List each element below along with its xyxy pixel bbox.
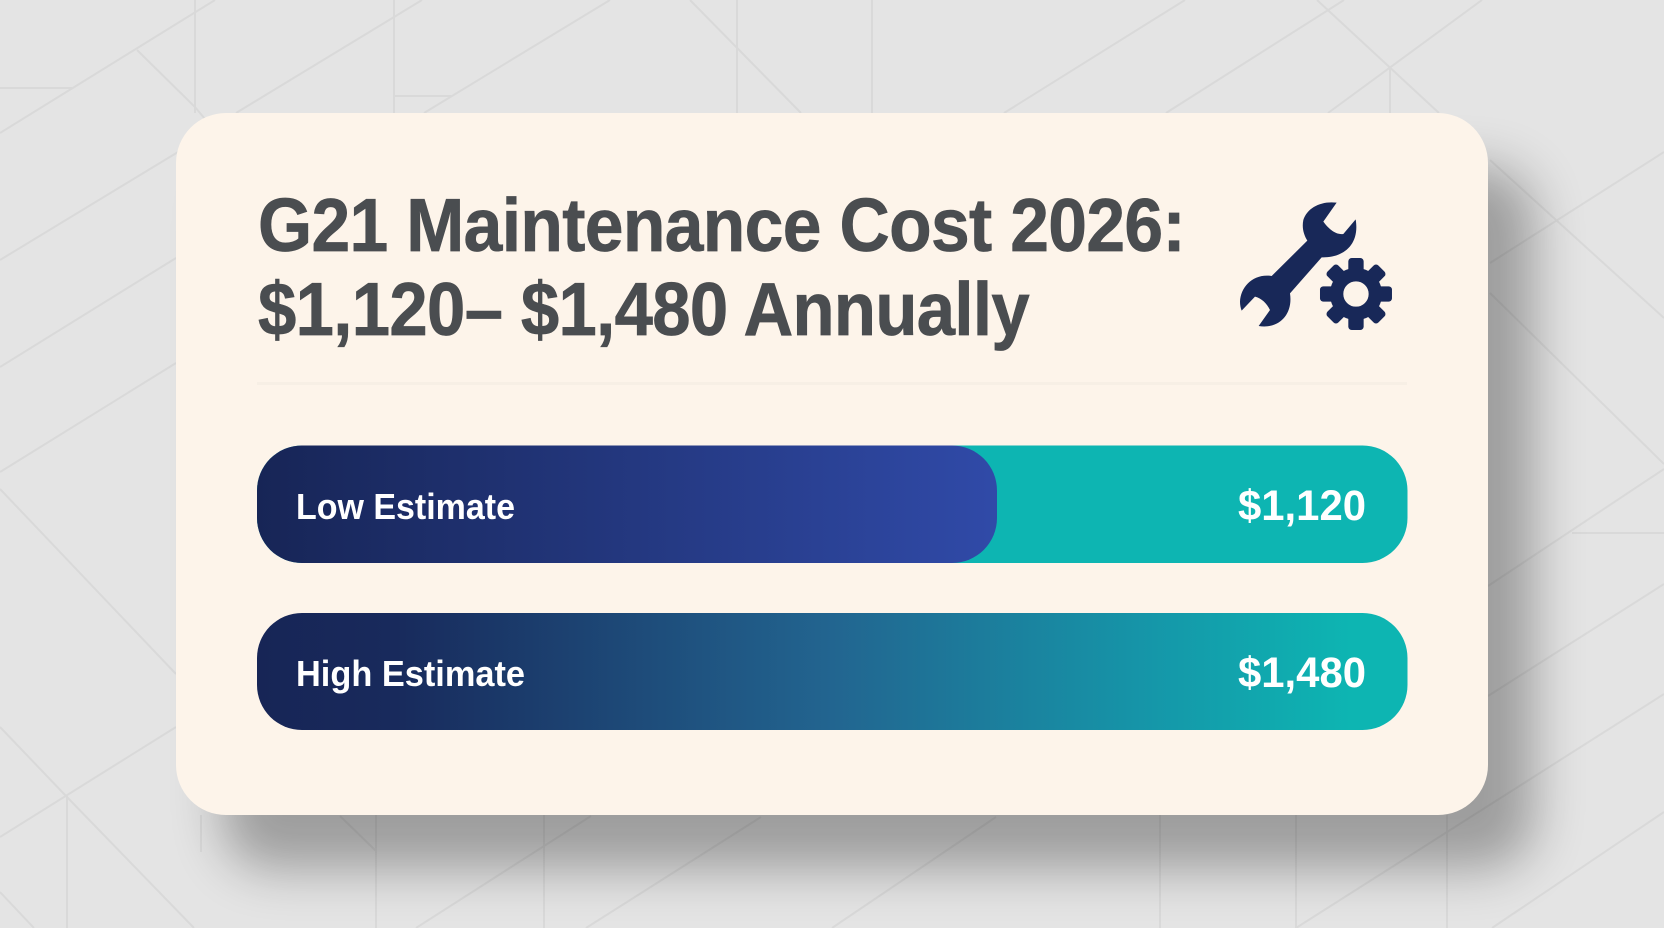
title bbox=[258, 183, 1185, 351]
low estimate bar bbox=[257, 446, 1408, 563]
title: G21 Maintenance Cost 2026: bbox=[258, 183, 1185, 267]
low estimate value: $1,120 bbox=[1238, 482, 1366, 530]
high estimate bar bbox=[257, 613, 1408, 730]
low estimate label: Low Estimate bbox=[296, 486, 515, 527]
high estimate value: $1,480 bbox=[1238, 649, 1366, 697]
title: $1,120– $1,480 Annually bbox=[258, 267, 1030, 351]
panel: maintenance cost card bbox=[176, 113, 1488, 815]
high estimate label: High Estimate bbox=[296, 653, 525, 694]
icon: wrench and gear bbox=[1240, 202, 1392, 330]
